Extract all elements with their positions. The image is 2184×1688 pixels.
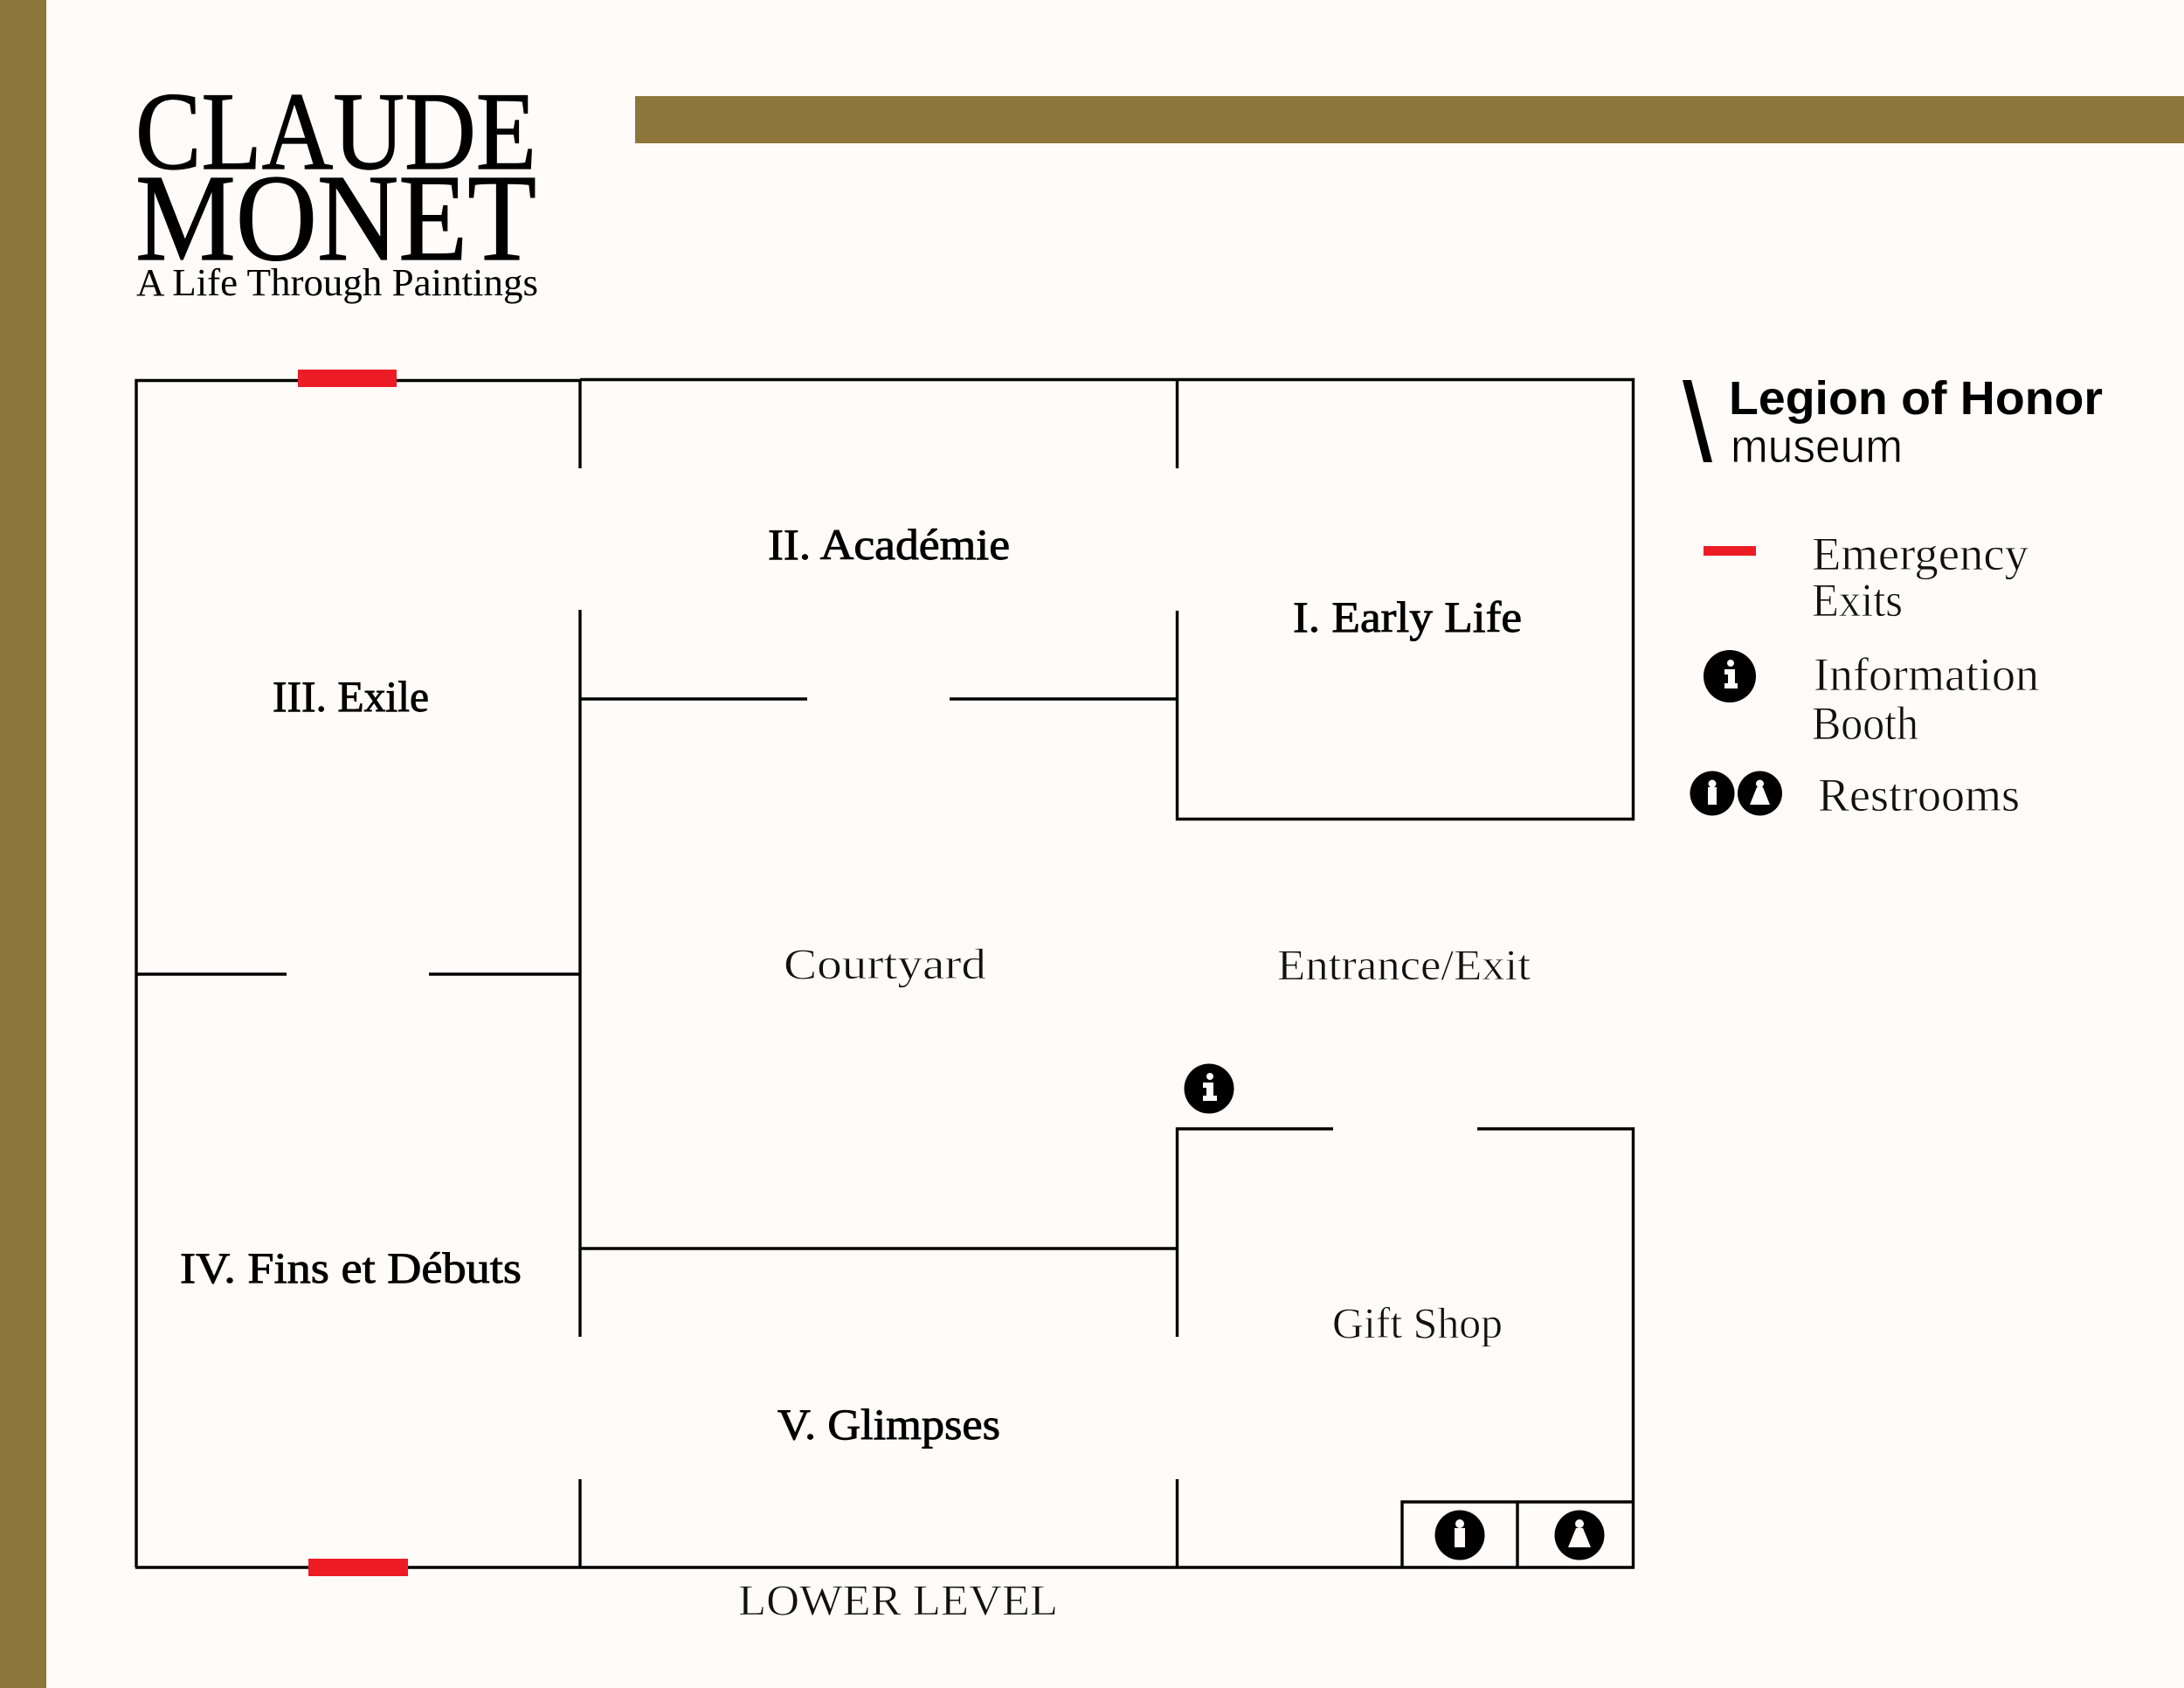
walls (135, 379, 1635, 1567)
icon: information booth on plan (1185, 1064, 1234, 1113)
room label: V. Glimpses: V. Glimpses (778, 1400, 1000, 1449)
museum logo (1683, 372, 2103, 473)
title: Monet: MONET (135, 149, 536, 287)
exits label: Exits (1812, 574, 1903, 626)
title block (135, 71, 538, 304)
subtitle: A Life Through Paintings (136, 261, 538, 304)
booth label: Booth (1812, 697, 1918, 750)
floor plan (135, 370, 1635, 1624)
room label: II. Académie: II. Académie (768, 520, 1010, 569)
museum name: Legion of Honor (1729, 372, 2103, 425)
label: Gift Shop: Gift Shop (1332, 1298, 1503, 1347)
information label: Information (1814, 648, 2039, 701)
icon: restroom women on plan (1555, 1510, 1604, 1560)
museum word: museum (1731, 420, 1903, 473)
emergency exit: bottom (308, 1559, 408, 1576)
label: Lower Level: LOWER LEVEL (738, 1575, 1058, 1624)
legend item: emergency exits (1704, 528, 2028, 626)
legend item: restrooms (1690, 769, 2020, 821)
emergency label: Emergency (1812, 528, 2028, 580)
emergency swatch (1704, 546, 1756, 556)
room label: III. Exile: III. Exile (273, 672, 429, 721)
icon: women (1738, 771, 1782, 816)
icon: restroom men on plan (1434, 1510, 1485, 1560)
top olive bar (635, 96, 2184, 143)
icon: logo slash (1683, 380, 1712, 462)
legend (1683, 372, 2103, 821)
left olive band (0, 0, 46, 1688)
room label: I. Early Life: I. Early Life (1293, 592, 1522, 641)
icon: information (1704, 650, 1756, 702)
room label: IV. Fins et Débuts: IV. Fins et Débuts (180, 1243, 522, 1292)
label: Courtyard: Courtyard (784, 939, 986, 988)
icon: men (1690, 771, 1735, 816)
legend item: information booth (1704, 648, 2039, 750)
restrooms label: Restrooms (1818, 769, 2020, 821)
emergency exit: top (298, 370, 397, 387)
label: Entrance/Exit: Entrance/Exit (1277, 940, 1531, 989)
title: Claude: CLAUDE (135, 71, 536, 193)
